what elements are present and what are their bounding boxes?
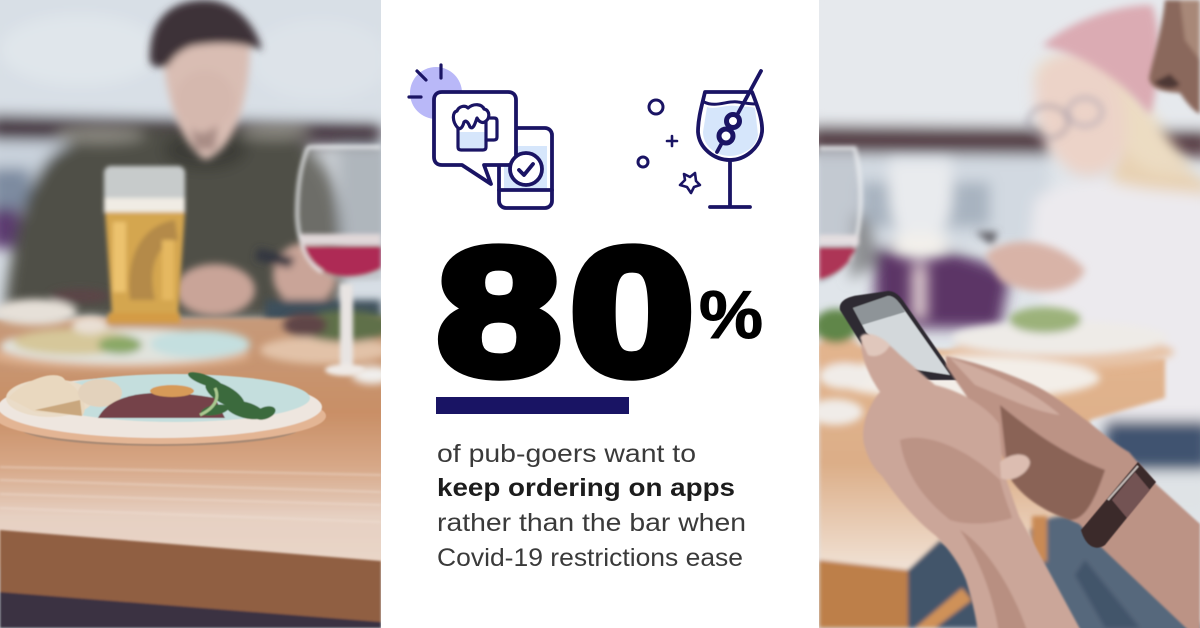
stat: 80: 0 (570, 211, 694, 412)
panel: central white stat card (381, 0, 819, 628)
wine glass (297, 147, 381, 376)
man's face at top right (1149, 0, 1200, 114)
phone (840, 291, 958, 380)
divider bar (436, 397, 629, 414)
body text: keep ordering on apps (437, 474, 735, 502)
body text: of pub-goers want to (437, 440, 696, 468)
main plate with food (0, 369, 326, 446)
body text (437, 440, 746, 572)
body text: Covid-19 restrictions ease (437, 544, 743, 572)
beer glass (104, 166, 185, 323)
stat: 80 (437, 211, 694, 412)
jeans (1030, 516, 1200, 628)
background wine glasses (888, 160, 953, 320)
stat: 80: 8 (437, 211, 561, 412)
icon: cocktail glass with olives and sparkles (638, 71, 762, 207)
back plate with salad (0, 289, 393, 384)
table and plates (819, 345, 1165, 628)
wristwatch (1081, 462, 1156, 548)
stat: percent sign: % (699, 277, 763, 353)
hands (860, 334, 1200, 628)
body text: rather than the bar when (437, 509, 746, 537)
photo: woman and hands holding phone (807, 0, 1200, 628)
photo: man at pub table (0, 0, 393, 628)
icon: beer order chat bubble and phone (409, 65, 552, 208)
